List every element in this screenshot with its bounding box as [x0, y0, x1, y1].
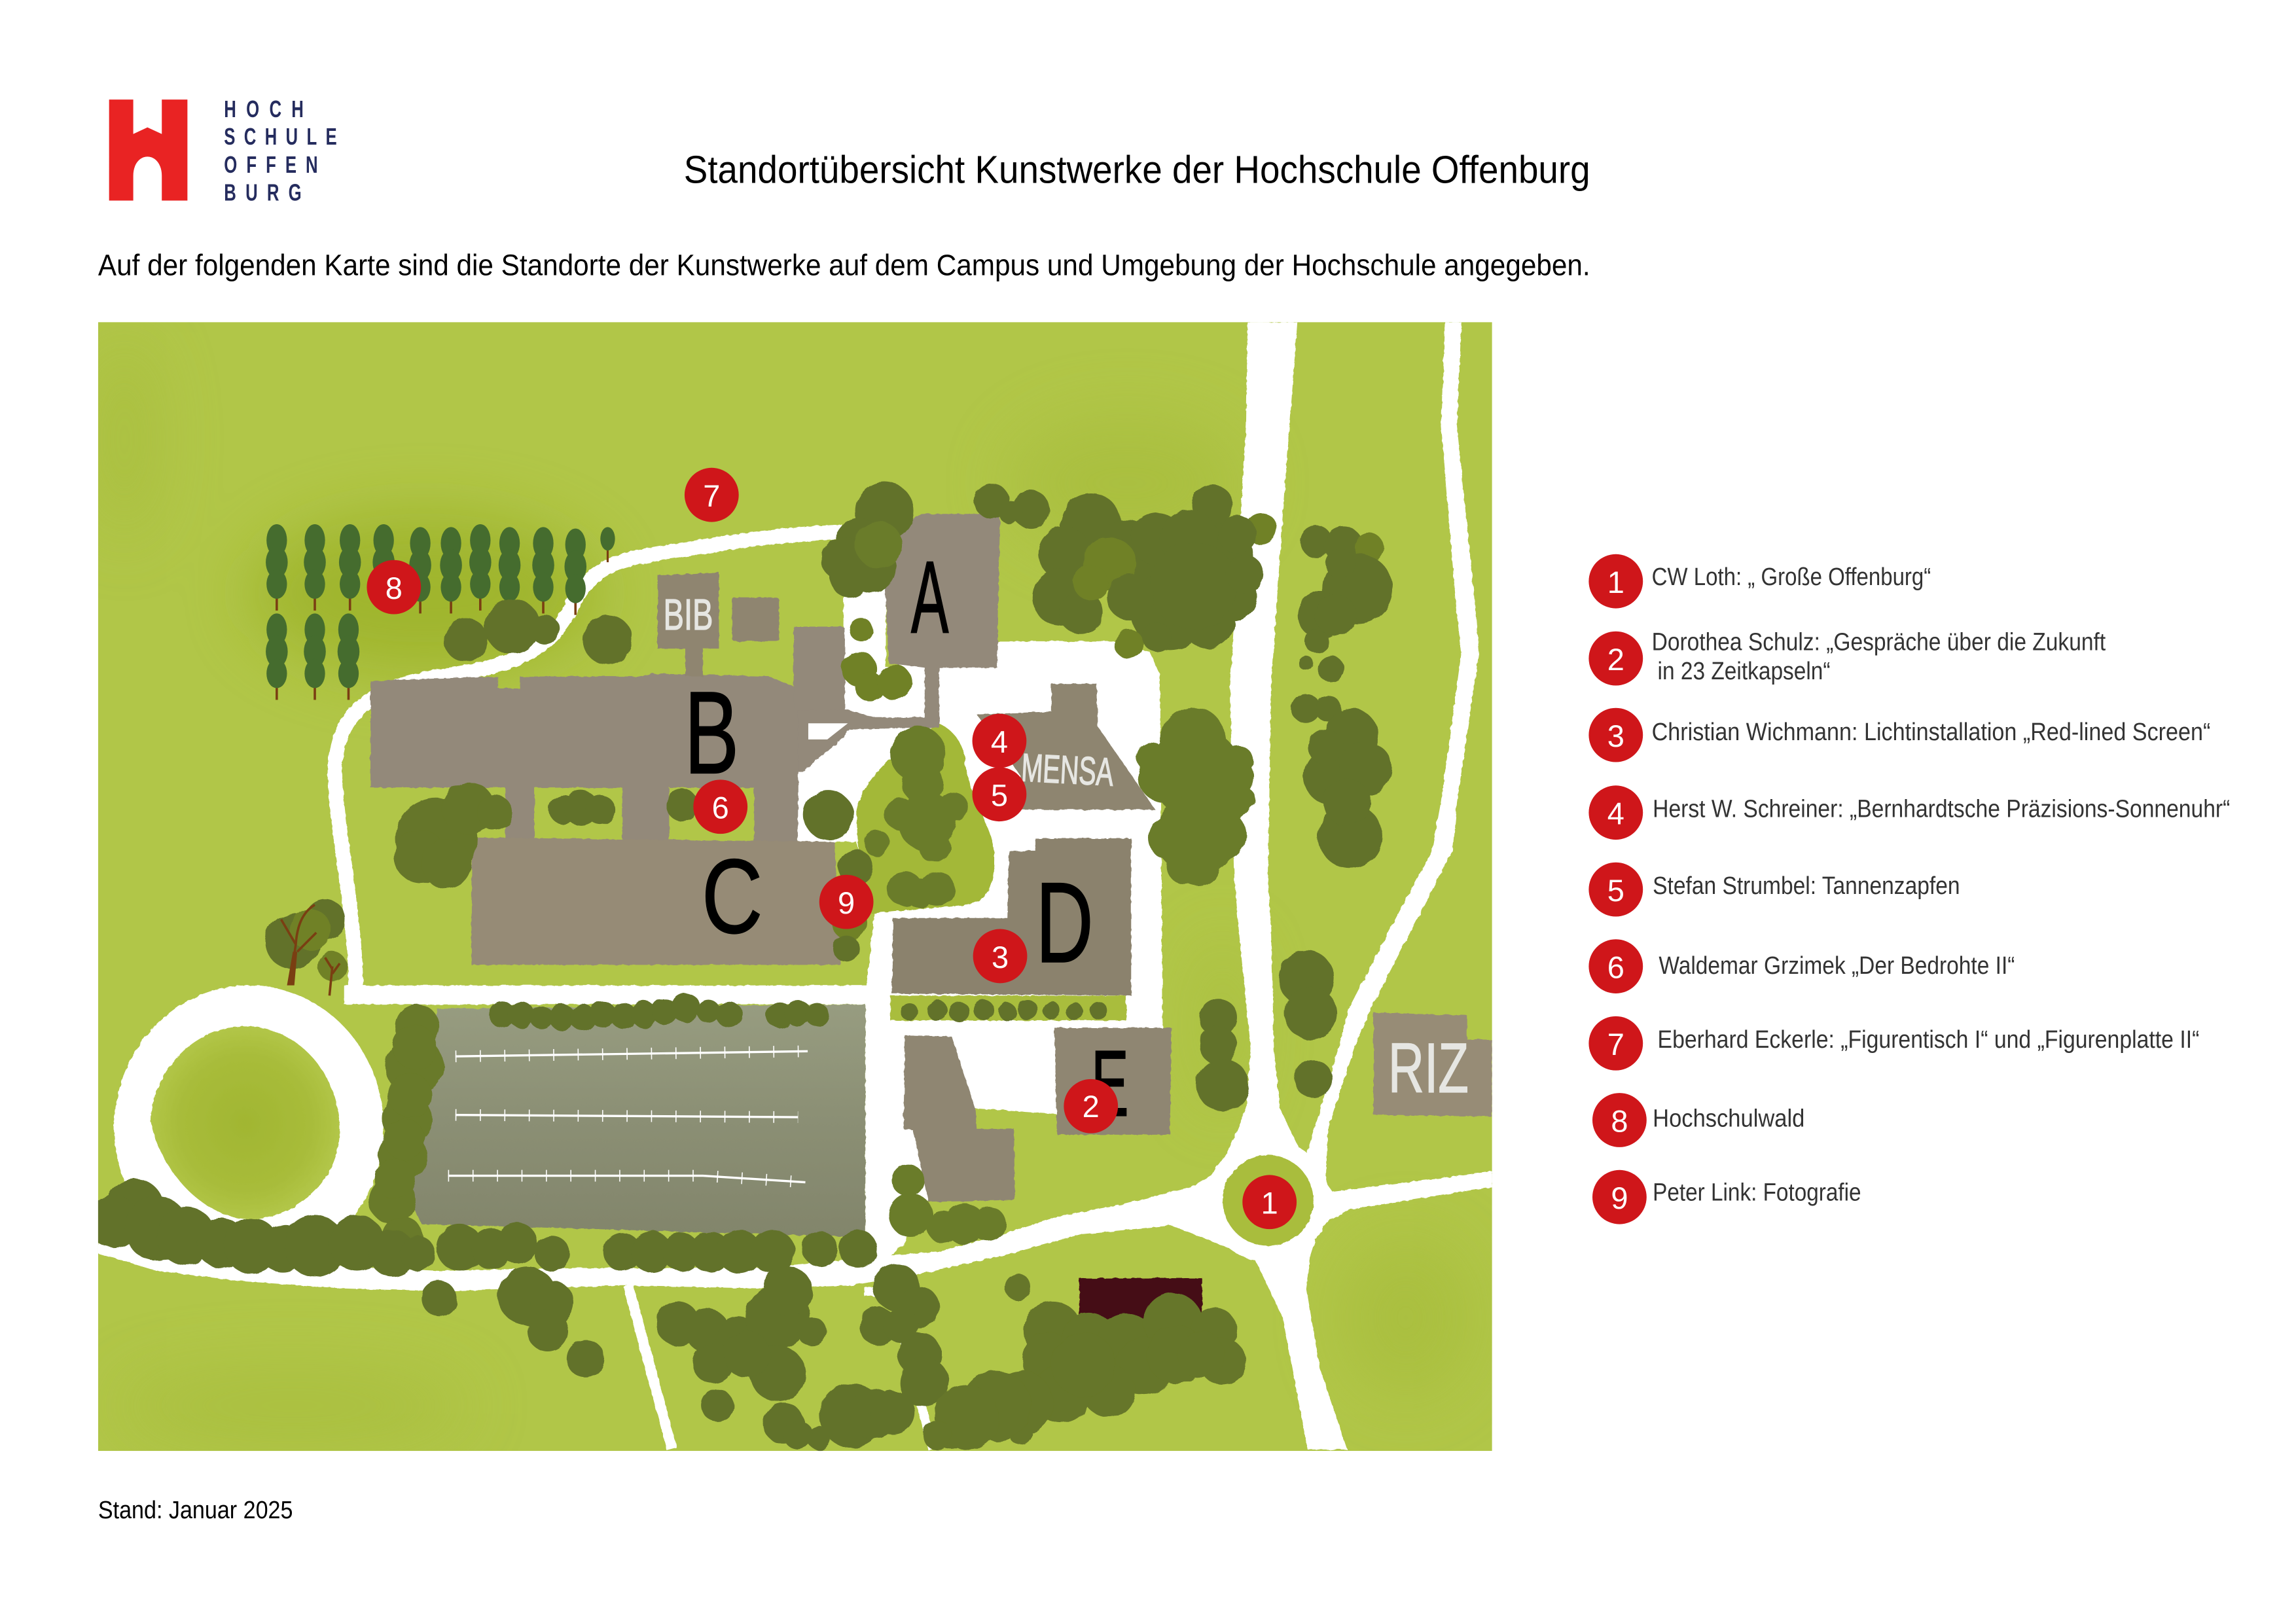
- logo wordmark: BURG: [224, 179, 302, 206]
- legend item 8: [1592, 1093, 1804, 1147]
- building E: [1054, 1028, 1172, 1135]
- marker 6: 6: [712, 791, 729, 825]
- trees south of road by dark building: [922, 1274, 1246, 1450]
- wing north of B: [794, 627, 845, 710]
- legend item 8: 8: [1611, 1103, 1628, 1138]
- legend item 8: Hochschulwald: [1653, 1105, 1804, 1133]
- legend item 7: 7: [1607, 1027, 1624, 1061]
- label B: B: [685, 667, 739, 798]
- car park surface: [410, 1005, 865, 1237]
- legend item 6: 6: [1607, 950, 1624, 984]
- building C: [471, 838, 840, 965]
- panel: campus map: [86, 322, 1492, 1451]
- main north-south road: [1226, 322, 1299, 1156]
- building labels: [663, 540, 1469, 1136]
- trees east of main road: [1291, 526, 1393, 868]
- footer date: Stand: Januar 2025: [98, 1497, 293, 1524]
- logo wordmark: [224, 96, 337, 206]
- legend item 3: Christian Wichmann: Lichtinstallation „Red-lined Screen“: [1652, 719, 2210, 746]
- logo wordmark: OFFEN: [224, 152, 318, 178]
- legend item 2: in 23 Zeitkapseln“: [1658, 658, 1831, 685]
- logo mark: [109, 99, 187, 201]
- trees east of mensa: [1136, 707, 1255, 886]
- marker 1: 1: [1261, 1186, 1278, 1221]
- building RIZ: [1374, 1012, 1492, 1116]
- east and south arms: [1255, 1164, 1492, 1450]
- roundabout ring: [1206, 1139, 1329, 1262]
- courtyard trees: [549, 789, 698, 826]
- building B: [370, 673, 798, 842]
- tree clusters: [86, 482, 1393, 1450]
- trees: Hochschulwald: [266, 524, 615, 700]
- label A: A: [911, 540, 949, 654]
- legend item 7: [1588, 1016, 2199, 1071]
- marker 3: 3: [992, 940, 1009, 974]
- road above car park: [344, 986, 886, 1005]
- legend item 3: [1588, 708, 2210, 762]
- roundabout island: [1223, 1155, 1314, 1246]
- south forest: [656, 1264, 949, 1450]
- label BIB: BIB: [663, 590, 713, 639]
- logo wordmark: SCHULE: [224, 124, 337, 150]
- marker 7: 7: [703, 478, 720, 513]
- library BIB: [658, 573, 719, 677]
- legend item 9: 9: [1611, 1181, 1628, 1215]
- trees left of building A: [821, 482, 914, 597]
- label C: C: [702, 837, 762, 955]
- marker 2: 2: [1083, 1089, 1100, 1124]
- trees with trunks near loop: [265, 899, 347, 995]
- small annex: [732, 597, 779, 641]
- label MENSA: MENSA: [1020, 745, 1115, 794]
- small trees on strip under D: [901, 1000, 1107, 1022]
- small trees by building A: [842, 618, 912, 702]
- label E: E: [1091, 1031, 1128, 1136]
- trees west of building C: [394, 782, 512, 889]
- mensa: [977, 684, 1155, 810]
- marker 5: [973, 767, 1026, 821]
- legend item 1: [1588, 554, 1931, 609]
- marker 4: 4: [991, 724, 1008, 759]
- map markers: [367, 468, 1297, 1229]
- marker 9: [819, 875, 874, 929]
- legend: [1588, 554, 2230, 1224]
- marker 9: 9: [838, 885, 855, 920]
- trees west of island: [804, 791, 872, 962]
- legend item 7: Eberhard Eckerle: „Figurentisch I“ und „Figurenplatte II“: [1658, 1026, 2199, 1054]
- marker 5: 5: [991, 778, 1008, 813]
- legend item 5: [1588, 863, 1960, 917]
- buildings: [370, 514, 1492, 1329]
- legend item 6: Waldemar Grzimek „Der Bedrohte II“: [1659, 952, 2015, 980]
- hedge south of car park: [603, 1230, 877, 1274]
- loop centre lawn: [151, 1026, 340, 1220]
- green island by mensa: [857, 723, 994, 914]
- logo wordmark: HOCH: [224, 96, 304, 122]
- label D: D: [1035, 859, 1094, 986]
- title: Standortübersicht Kunstwerke der Hochschule Offenburg: [684, 148, 1590, 192]
- green strip under building D: [890, 995, 1126, 1020]
- forest row 1: [266, 524, 615, 615]
- trees by roundabout: [1196, 950, 1337, 1111]
- notch between buildings: [808, 723, 848, 740]
- marker 2: [1064, 1079, 1118, 1133]
- tree column west of car park: [369, 1005, 444, 1258]
- legend item 2: 2: [1607, 642, 1624, 677]
- hedge on car park north: [489, 993, 829, 1031]
- building A: [795, 514, 1000, 772]
- car park: [410, 1005, 865, 1237]
- trees on mensa island: [864, 726, 968, 908]
- marker 1: [1242, 1175, 1297, 1229]
- marker 8: [367, 560, 421, 615]
- map background meadow: [98, 322, 1492, 1451]
- legend item 1: CW Loth: „ Große Offenburg“: [1652, 563, 1931, 591]
- legend item 4: Herst W. Schreiner: „Bernhardtsche Präzisions-Sonnenuhr“: [1653, 795, 2230, 823]
- south path west: [628, 1285, 672, 1450]
- marker 6: [693, 779, 747, 834]
- campus plaza: [795, 577, 1162, 1266]
- roads: [98, 322, 1492, 1450]
- building F: [903, 1035, 1014, 1202]
- marker 3: [973, 929, 1027, 983]
- large tree group north: [1032, 485, 1277, 659]
- parking row 3: [448, 1176, 805, 1183]
- west road: [98, 1168, 1274, 1291]
- meadow shading patches: [95, 337, 1471, 1442]
- dark red building: [1079, 1278, 1202, 1329]
- legend item 6: [1588, 939, 2015, 993]
- marker 8: 8: [386, 571, 403, 605]
- turning loop: [115, 986, 384, 1270]
- intro text: Auf der folgenden Karte sind die Standorte der Kunstwerke auf dem Campus und Umgebung der Hochschule angegeben.: [98, 248, 1590, 282]
- trees right of building A: [974, 483, 1050, 529]
- legend item 4: [1588, 785, 2230, 840]
- legend item 2: Dorothea Schulz: „Gespräche über die Zukunft: [1652, 628, 2106, 656]
- legend item 5: 5: [1607, 873, 1624, 908]
- south path east: [864, 1291, 933, 1450]
- legend item 1: 1: [1607, 565, 1624, 599]
- legend item 2: [1588, 628, 2106, 685]
- tree band south-west: [86, 1179, 605, 1378]
- trees north of building B: [444, 599, 632, 665]
- north-west path: [335, 531, 842, 988]
- north-east road: [1303, 322, 1479, 1193]
- trees south of building F: [889, 1164, 1006, 1245]
- marker 7: [685, 468, 739, 522]
- legend item 9: [1592, 1170, 1861, 1224]
- parking row 1: [456, 1051, 808, 1056]
- logo: Hochschule Offenburg: [109, 96, 337, 206]
- label RIZ: RIZ: [1388, 1029, 1469, 1107]
- forest row 2: [266, 613, 359, 700]
- legend item 9: Peter Link: Fotografie: [1653, 1179, 1861, 1207]
- marker 4: [973, 714, 1026, 768]
- legend item 4: 4: [1607, 796, 1624, 831]
- building D: [891, 838, 1131, 995]
- legend item 3: 3: [1607, 719, 1624, 753]
- legend item 5: Stefan Strumbel: Tannenzapfen: [1653, 872, 1960, 900]
- parking row 2: [456, 1115, 798, 1117]
